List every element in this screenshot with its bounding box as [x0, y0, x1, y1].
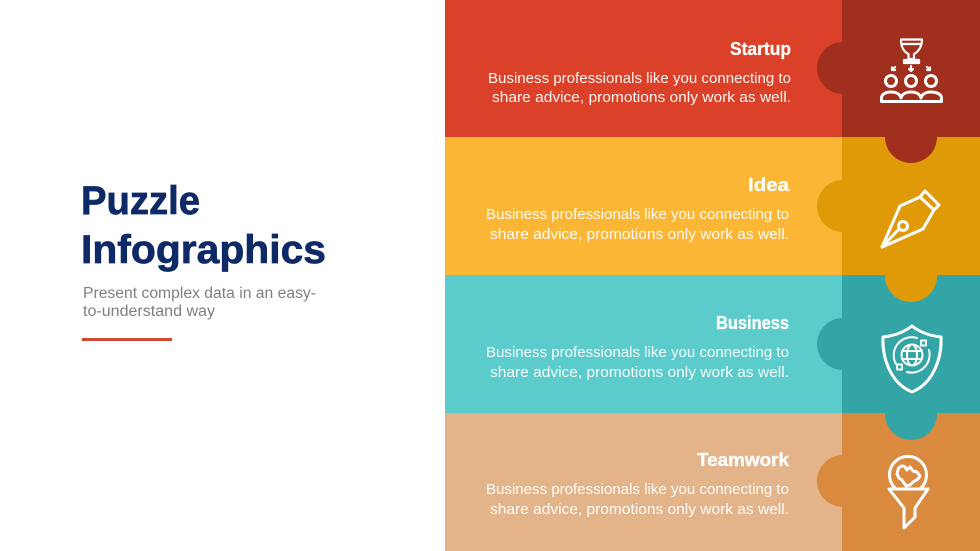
heading: startup: Startup [730, 38, 791, 59]
text: business description: share advice, promotions only work as well. [490, 365, 789, 381]
panel: teamwork [445, 413, 980, 551]
subtitle: Present complex data in an easy- [83, 285, 316, 302]
heading: business: Business [716, 312, 789, 333]
icon: globe funnel [889, 456, 928, 528]
panel: business [445, 275, 980, 440]
panel: startup [445, 0, 980, 163]
subtitle: to-understand way [83, 303, 215, 320]
text: business description [486, 345, 789, 381]
text: startup description: Business professionals like you connecting to [488, 71, 791, 87]
accent line [82, 338, 172, 341]
title: Puzzle [81, 179, 200, 223]
title [81, 179, 326, 272]
heading: teamwork: Teamwork [697, 449, 790, 470]
text: startup description: share advice, promotions only work as well. [492, 90, 791, 106]
text: idea description: share advice, promotions only work as well. [490, 227, 789, 243]
panel: idea [445, 137, 980, 302]
title: Infographics [81, 228, 326, 272]
text: idea description [486, 207, 789, 243]
icon: fountain pen nib [882, 191, 939, 247]
icon: globe shield [883, 326, 941, 392]
text: teamwork description: Business professionals like you connecting to [486, 482, 789, 498]
text: business description: Business professionals like you connecting to [486, 345, 789, 361]
icon: trophy and team [882, 40, 942, 102]
text: idea description: Business professionals like you connecting to [486, 207, 789, 223]
subtitle [83, 285, 316, 320]
text: teamwork description [486, 482, 789, 518]
text: teamwork description: share advice, promotions only work as well. [490, 502, 789, 518]
text: startup description [488, 71, 791, 106]
heading: idea: Idea [748, 174, 790, 195]
